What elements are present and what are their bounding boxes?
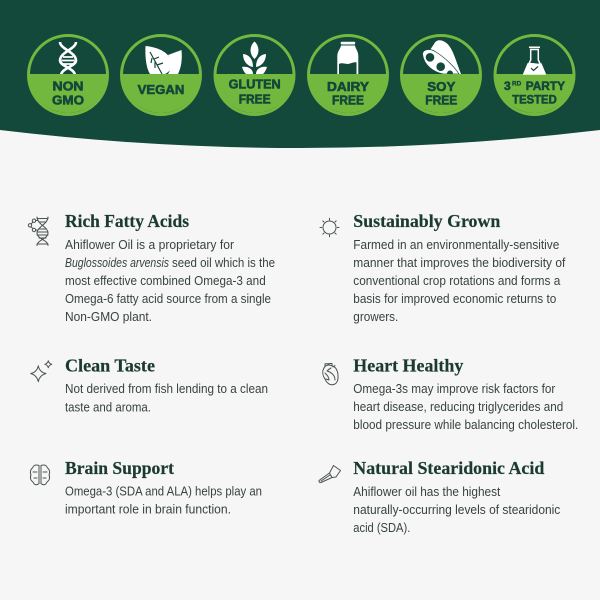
icon: anatomical heart xyxy=(323,364,338,385)
body text xyxy=(353,484,561,535)
icon: soy pods xyxy=(422,40,461,76)
heading: Brain Support xyxy=(65,458,174,478)
badge: soy free: FREE xyxy=(425,93,457,107)
body text xyxy=(65,381,268,414)
badge: gluten free: FREE xyxy=(239,92,271,106)
body text: Farmed in an environmentally-sensitive xyxy=(353,237,559,252)
body text: taste and aroma. xyxy=(65,399,151,414)
badge: 3rd party tested: RD xyxy=(512,80,522,88)
icon: sparkles xyxy=(31,361,52,382)
body text xyxy=(65,237,275,324)
body text: Omega-6 fatty acid source from a single xyxy=(65,291,271,306)
heading: Clean Taste xyxy=(65,356,155,376)
feature: brain support xyxy=(30,458,262,517)
body text xyxy=(353,237,566,324)
body text: most effective combined Omega-3 and xyxy=(65,273,266,288)
icon: dropper xyxy=(319,466,340,483)
badge: soy free: SOY xyxy=(427,80,456,94)
body text: acid (SDA). xyxy=(353,520,410,535)
feature: rich fatty acids xyxy=(28,211,275,324)
body text: naturally-occurring levels of stearidonic xyxy=(353,502,561,517)
badge: vegan xyxy=(122,36,200,114)
badge: dairy free xyxy=(308,36,388,114)
body text: Not derived from fish lending to a clean xyxy=(65,381,268,396)
body text: conventional crop rotations and forms a xyxy=(353,273,561,288)
badge: non gmo: NON xyxy=(52,80,84,94)
body text: blood pressure while balancing cholesterol. xyxy=(353,417,578,432)
heading: Rich Fatty Acids xyxy=(65,211,189,231)
badge: dairy free: DAIRY xyxy=(327,80,370,94)
icon: dna xyxy=(60,42,76,75)
badge: 3rd party tested: PARTY xyxy=(526,79,565,93)
body text xyxy=(353,381,578,432)
badge: soy free xyxy=(402,36,480,114)
badge: vegan: VEGAN xyxy=(138,83,184,97)
badge: 3rd party tested: 3 xyxy=(504,79,511,93)
body text: Ahiflower Oil is a proprietary for xyxy=(65,237,235,252)
icon: flask xyxy=(523,46,546,74)
badge: gluten free: GLUTEN xyxy=(229,78,281,92)
body text: important role in brain function. xyxy=(65,502,231,517)
badge: non gmo: GMO xyxy=(52,93,84,107)
icon: brain xyxy=(30,465,50,485)
feature: heart healthy xyxy=(323,356,578,432)
feature: clean taste xyxy=(31,356,268,414)
badge: non gmo xyxy=(28,36,108,114)
body text: heart disease, reducing triglycerides and xyxy=(353,399,563,414)
badge: 3rd party tested: TESTED xyxy=(512,92,557,106)
body text: Buglossoides arvensis xyxy=(65,255,169,270)
body text: basis for improved economic returns to xyxy=(353,291,556,306)
body text: Ahiflower oil has the highest xyxy=(353,484,501,499)
body text: Non-GMO plant. xyxy=(65,309,152,324)
body text: Omega-3 (SDA and ALA) helps play an xyxy=(65,484,262,499)
feature: sustainably grown xyxy=(320,211,566,324)
badge: gluten free xyxy=(215,36,294,114)
heading: Natural Stearidonic Acid xyxy=(353,458,544,478)
header band xyxy=(0,0,600,148)
heading: Heart Healthy xyxy=(353,356,463,376)
icon: wheat xyxy=(242,42,267,74)
body text: Omega-3s may improve risk factors for xyxy=(353,381,556,396)
icon: dna with molecule xyxy=(28,217,48,246)
body text: manner that improves the biodiversity of xyxy=(353,255,566,270)
body text: growers. xyxy=(353,309,398,324)
feature: natural stearidonic acid xyxy=(319,458,561,535)
body text: seed oil which is the xyxy=(172,255,275,270)
badge: dairy free: FREE xyxy=(332,93,364,107)
icon: sun xyxy=(320,218,339,237)
icon: milk bottle xyxy=(337,42,358,74)
badge: 3rd party tested xyxy=(495,36,574,114)
icon: leaves xyxy=(145,46,182,74)
heading: Sustainably Grown xyxy=(353,211,500,231)
body text xyxy=(65,484,262,517)
